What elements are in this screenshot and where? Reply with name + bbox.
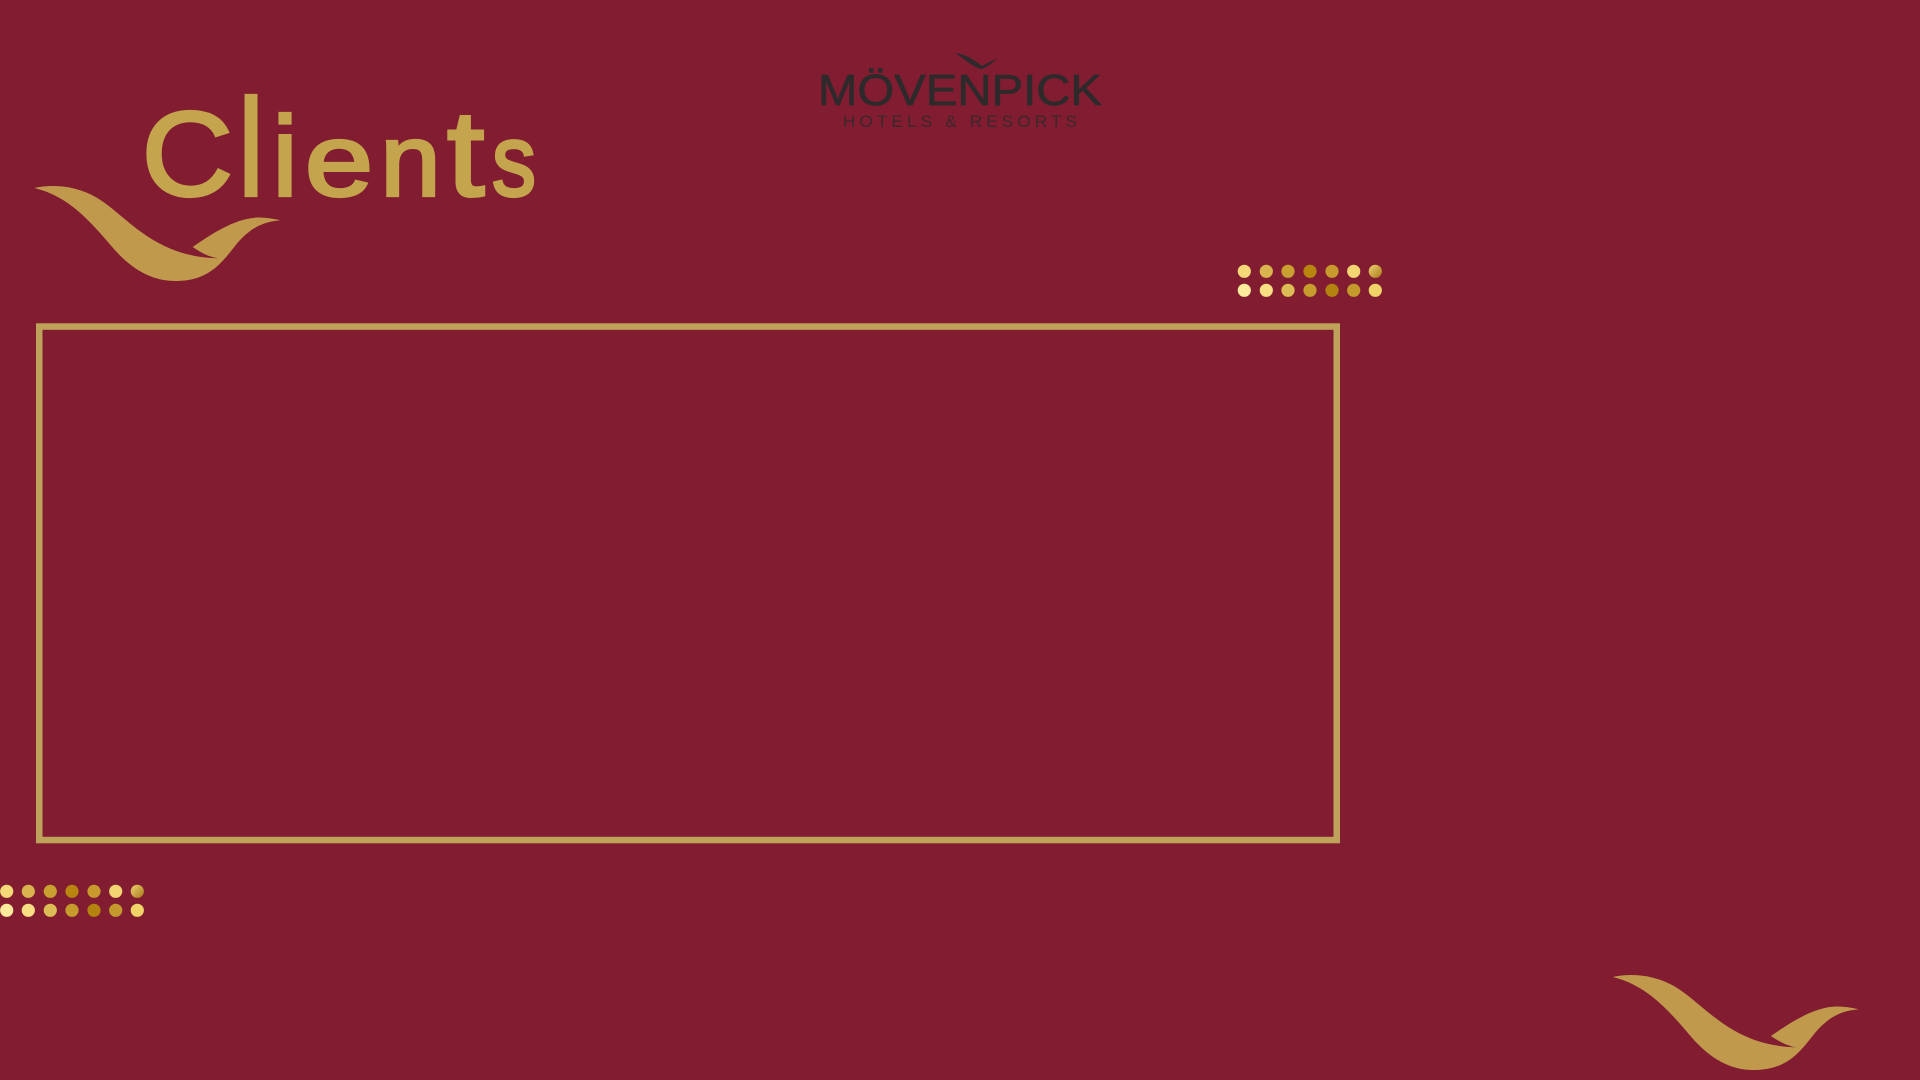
- icon: gold bird bottom right: [1613, 975, 1858, 1070]
- logo wordmark: MÖVENPICK: [818, 66, 1102, 115]
- icon: gold bird top left: [34, 186, 280, 281]
- logo bird: [955, 53, 998, 69]
- title: i: [272, 94, 298, 220]
- panel: empty gold frame: [39, 327, 1337, 840]
- title: C: [142, 88, 233, 222]
- dots: bottom left: [0, 885, 144, 917]
- title: t: [447, 86, 484, 222]
- dots: top right: [1238, 265, 1382, 297]
- logo tagline: HOTELS & RESORTS: [843, 112, 1077, 131]
- title: n: [380, 104, 440, 218]
- title: s: [492, 104, 536, 218]
- title: e: [305, 104, 373, 218]
- logo: Movenpick: [818, 53, 1102, 131]
- title: l: [238, 72, 264, 226]
